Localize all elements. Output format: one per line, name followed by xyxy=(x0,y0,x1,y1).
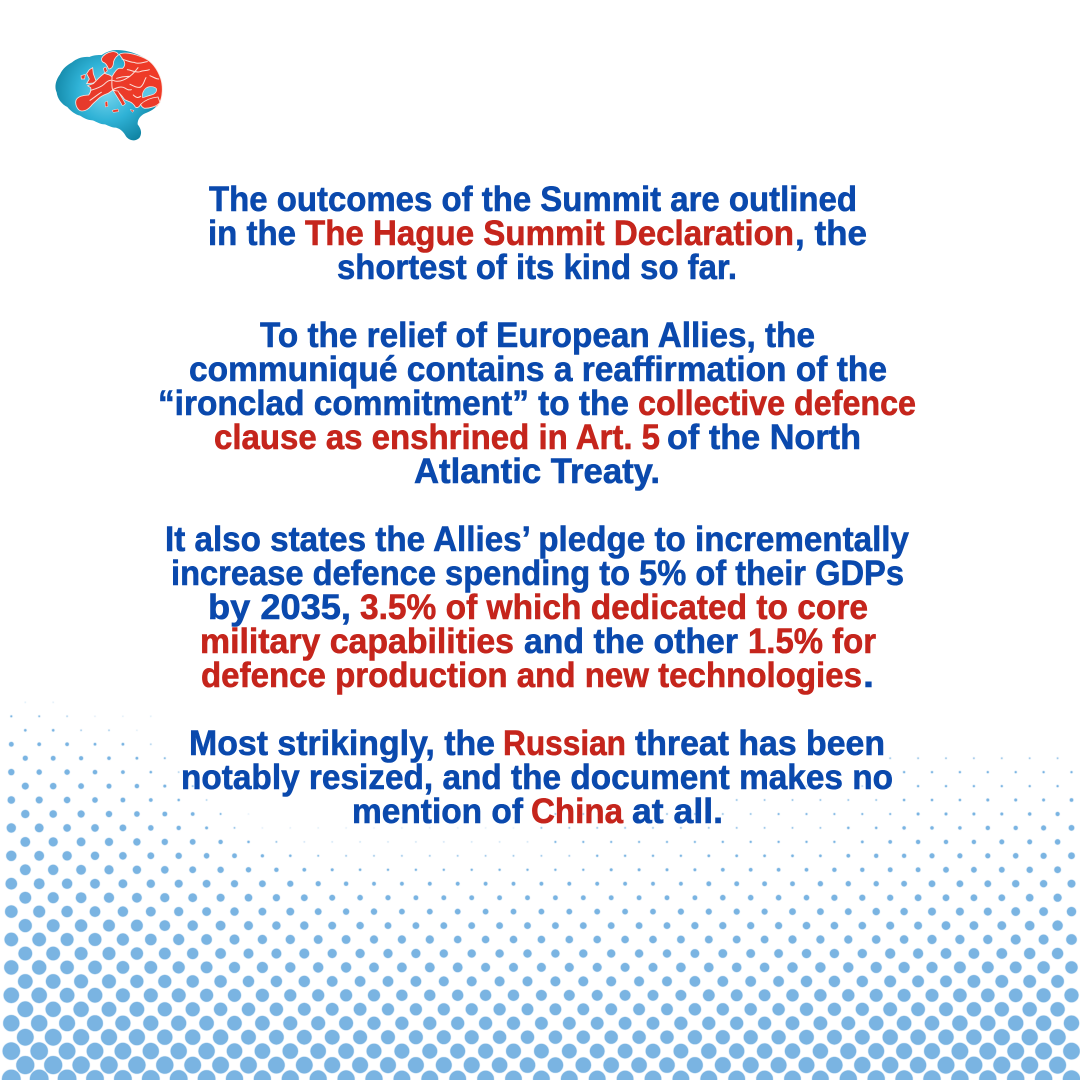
paragraph: Russia and China: Russian xyxy=(503,724,626,763)
Mediterranean islands xyxy=(105,101,134,112)
paragraph: defence spending pledge: defence production and new technologies xyxy=(201,656,862,695)
logo: brain with map of Europe xyxy=(55,50,162,140)
paragraph: defence spending pledge xyxy=(165,520,910,695)
Scandinavia xyxy=(102,52,118,69)
paragraph: summit outcomes: in the xyxy=(208,214,296,253)
paragraph: summit outcomes: shortest of its kind so far. xyxy=(337,248,737,287)
paragraph: defence spending pledge: and the other xyxy=(524,622,738,661)
Turkey xyxy=(141,97,160,108)
paragraph: collective defence reaffirmed: Atlantic Treaty. xyxy=(414,452,660,491)
paragraph: Russia and China: notably resized, and the document makes no xyxy=(181,758,893,797)
paragraph: collective defence reaffirmed: clause as enshrined in Art. 5 xyxy=(214,418,660,457)
paragraph: collective defence reaffirmed: collective defence xyxy=(638,384,916,423)
paragraph: defence spending pledge: . xyxy=(863,656,874,695)
Denmark xyxy=(103,67,107,73)
paragraph: summit outcomes: , the xyxy=(795,214,867,253)
paragraph: Russia and China: at all. xyxy=(632,792,723,831)
background: halftone dot pattern xyxy=(11,702,1073,1079)
paragraph: summit outcomes xyxy=(208,180,867,287)
paragraph: collective defence reaffirmed: of the North xyxy=(667,418,861,457)
paragraph: Russia and China: mention of xyxy=(352,792,523,831)
paragraph: Russia and China: threat has been xyxy=(635,724,885,763)
paragraph: summit outcomes: The Hague Summit Declaration xyxy=(305,214,794,253)
paragraph: collective defence reaffirmed xyxy=(158,316,916,491)
paragraph: Russia and China xyxy=(181,724,893,831)
paragraph: defence spending pledge: 1.5% for xyxy=(748,622,876,661)
paragraph: defence spending pledge: It also states the Allies’ pledge to incrementally xyxy=(165,520,910,559)
paragraph: collective defence reaffirmed: “ironclad commitment” to the xyxy=(158,384,629,423)
Europe mainland xyxy=(76,53,162,111)
Italy xyxy=(113,91,125,105)
paragraph: defence spending pledge: by 2035, xyxy=(208,588,351,627)
paragraph: summit outcomes: The outcomes of the Summit are outlined xyxy=(209,180,857,219)
paragraph: defence spending pledge: military capabilities xyxy=(200,622,514,661)
paragraph: Russia and China: China xyxy=(531,792,623,831)
brain outline xyxy=(55,50,162,140)
Internal borders xyxy=(90,59,159,100)
Ireland xyxy=(81,74,85,79)
paragraph: collective defence reaffirmed: To the relief of European Allies, the xyxy=(260,316,815,355)
paragraph: collective defence reaffirmed: communiqué contains a reaffirmation of the xyxy=(189,350,887,389)
paragraph: defence spending pledge: 3.5% of which dedicated to core xyxy=(360,588,868,627)
paragraph: defence spending pledge: increase defence spending to 5% of their GDPs xyxy=(171,554,904,593)
paragraph: Russia and China: Most strikingly, the xyxy=(189,724,495,763)
Great Britain xyxy=(87,68,96,84)
Black Sea patch xyxy=(142,87,157,98)
